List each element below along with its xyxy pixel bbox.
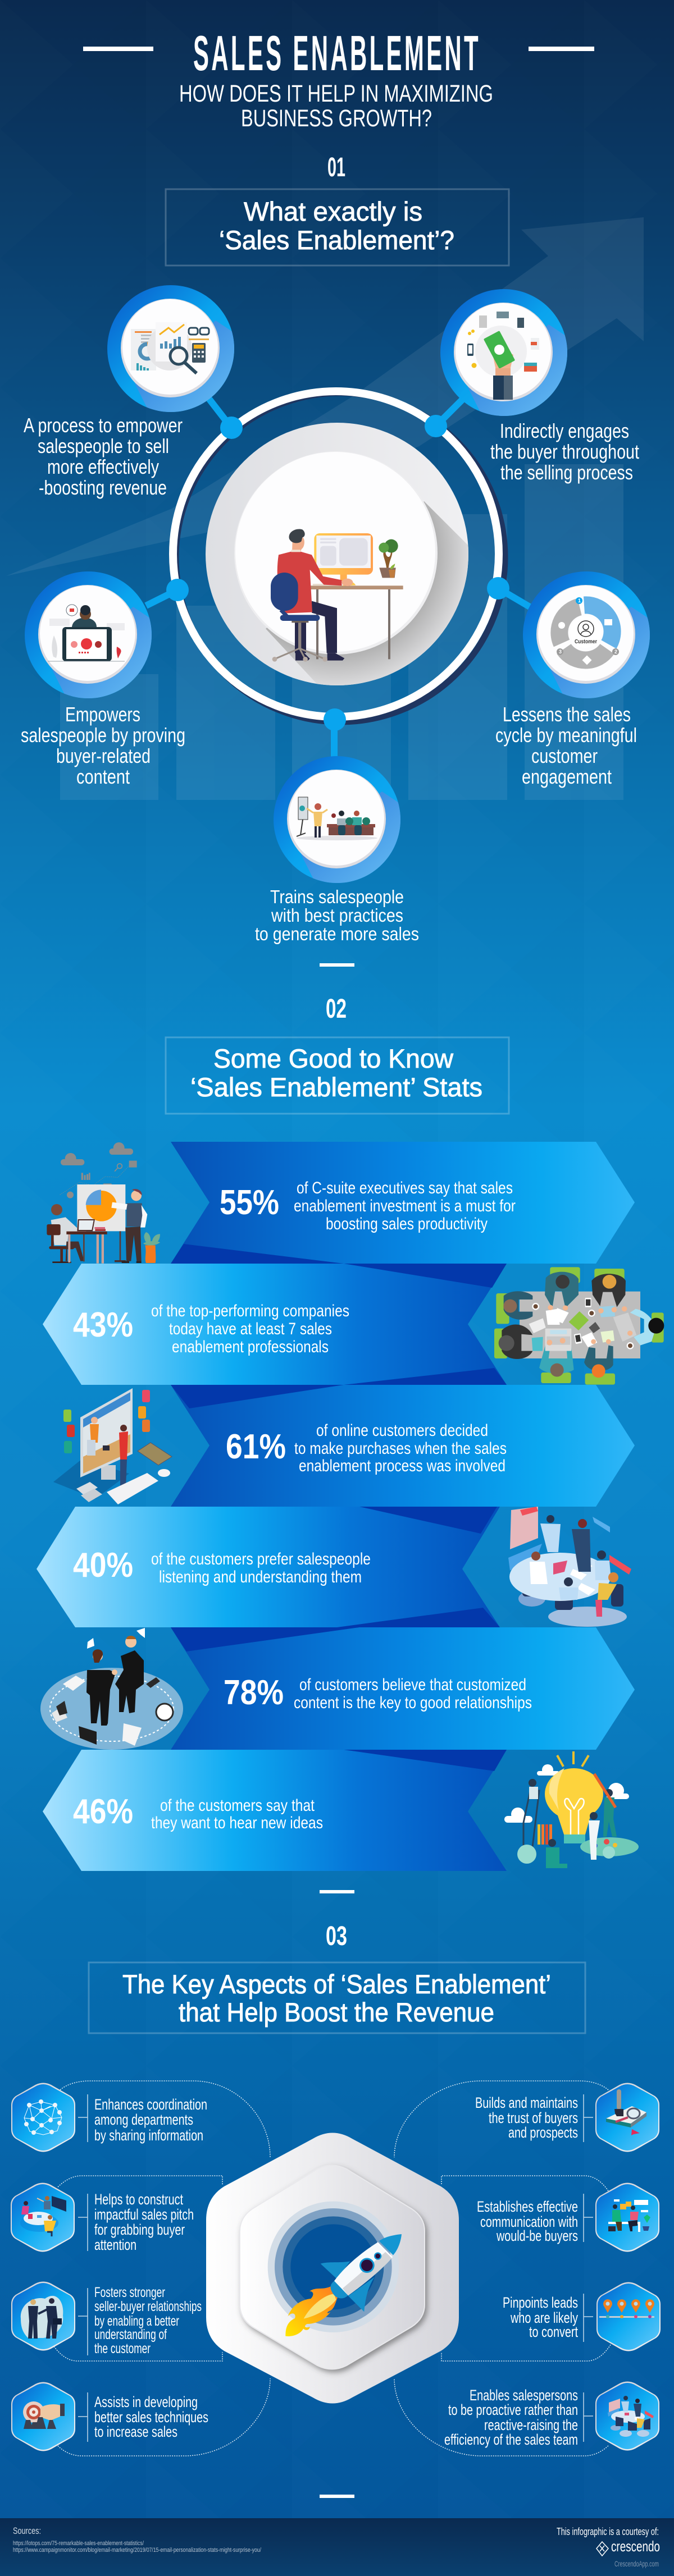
aspect 3 right xyxy=(503,2282,661,2351)
subtitle: BUSINESS GROWTH? xyxy=(241,105,432,132)
text: Enables salespersons xyxy=(470,2387,578,2404)
text: indirectly engages: the selling process xyxy=(500,461,633,484)
text: indirectly engages: the buyer throughout xyxy=(490,440,639,463)
stat 1 xyxy=(47,1142,635,1264)
text: indirectly engages: Indirectly engages xyxy=(500,419,629,442)
text: empowers xyxy=(21,703,185,788)
leader line xyxy=(78,2094,88,2142)
leader line xyxy=(78,2288,88,2355)
courtesy and logo xyxy=(557,2526,660,2568)
logo mark xyxy=(596,2542,608,2556)
text xyxy=(503,2294,578,2340)
hexagon icon: handshake xyxy=(11,2281,75,2351)
hexagon icon: sales pitch xyxy=(11,2182,75,2252)
background chart: bars and rising arrow xyxy=(6,217,644,800)
text: Pinpoints leads xyxy=(503,2294,578,2311)
leader line xyxy=(584,2094,593,2142)
illustration: top view table xyxy=(494,1267,664,1385)
stat text: enablement investment is a must for xyxy=(294,1197,516,1215)
text: lessens: engagement xyxy=(522,765,612,788)
text: indirectly engages xyxy=(490,419,639,484)
value 55%: 55% xyxy=(220,1183,279,1222)
illustration: person at desk xyxy=(271,529,403,662)
stat text: enablement process was involved xyxy=(299,1457,506,1475)
text: process: A process to empower xyxy=(24,414,183,437)
text xyxy=(477,2198,578,2244)
item: indirectly engages icon xyxy=(440,289,582,425)
text: Builds and maintains xyxy=(475,2094,578,2111)
illustration: light bulb xyxy=(504,1751,639,1868)
value 46%: 46% xyxy=(73,1792,133,1831)
arrow band 4 xyxy=(37,1507,500,1627)
text: process: -boosting revenue xyxy=(39,476,167,499)
aspect 4 left xyxy=(11,2382,208,2451)
sources xyxy=(13,2525,262,2554)
text: trains: to generate more sales xyxy=(255,923,419,944)
section number 02: 02 xyxy=(326,994,347,1024)
text: Fosters stronger xyxy=(94,2285,165,2300)
text xyxy=(94,2285,202,2357)
hexagon icon: conversation xyxy=(595,2182,659,2252)
text: efficiency of the sales team xyxy=(444,2431,578,2448)
item: lessens icon: 3 xyxy=(559,649,562,655)
stat text xyxy=(151,1550,371,1586)
text: lessens: Lessens the sales xyxy=(503,703,631,726)
stat text: listening and understanding them xyxy=(159,1568,362,1586)
aspect 1 left xyxy=(11,2083,207,2152)
aspect 1 right xyxy=(475,2083,659,2152)
heading box 02: ‘Sales Enablement’ Stats xyxy=(190,1072,482,1102)
stat 5 xyxy=(40,1627,635,1750)
footer xyxy=(0,2518,674,2576)
stat text: today have at least 7 sales xyxy=(169,1320,332,1338)
item: trains icon xyxy=(274,756,416,893)
illustration: meeting xyxy=(508,1507,631,1627)
text: the customer xyxy=(94,2341,151,2357)
stat text: they want to hear new ideas xyxy=(151,1814,323,1832)
value 78%: 78% xyxy=(224,1673,284,1712)
aspect 2 left xyxy=(11,2182,194,2253)
stat text: enablement professionals xyxy=(172,1338,329,1356)
title block xyxy=(83,25,594,132)
stat text xyxy=(151,1796,323,1832)
heading box 02: Some Good to Know xyxy=(213,1044,454,1073)
sources: https://lotops.com/75-remarkable-sales-enablement-statistics/ xyxy=(13,2540,144,2547)
aspect 2 right xyxy=(477,2182,659,2252)
text: better sales techniques xyxy=(94,2409,208,2426)
leader line xyxy=(584,2392,593,2442)
text xyxy=(94,2394,208,2440)
text xyxy=(94,2096,207,2144)
stat text: of C-suite executives say that sales xyxy=(297,1179,513,1197)
connector nodes xyxy=(166,415,509,731)
stat 3 xyxy=(53,1385,635,1507)
text: communication with xyxy=(480,2213,578,2230)
stat text xyxy=(294,1179,516,1233)
stat text xyxy=(151,1302,349,1356)
text: lessens: cycle by meaningful xyxy=(495,724,637,747)
item: lessens icon xyxy=(523,571,665,708)
text: reactive-raising the xyxy=(484,2417,578,2433)
illustration: presentation xyxy=(47,1142,160,1264)
text: process: salespeople to sell xyxy=(38,434,169,457)
text: Helps to construct xyxy=(94,2191,183,2208)
heading box 01: ‘Sales Enablement’? xyxy=(219,225,454,255)
stat text xyxy=(294,1421,507,1475)
aspect 4 right xyxy=(444,2381,659,2451)
arrow band 3 xyxy=(171,1385,635,1507)
subtitle: HOW DOES IT HELP IN MAXIMIZING xyxy=(179,80,493,107)
text: the trust of buyers xyxy=(489,2110,578,2126)
arrow band 6 xyxy=(43,1750,507,1871)
text: by sharing information xyxy=(94,2127,203,2144)
text: attention xyxy=(94,2236,136,2253)
arrow band 1 xyxy=(171,1142,635,1264)
item: lessens icon: 2 xyxy=(614,649,617,655)
item: lessens icon: Customer xyxy=(575,639,597,645)
text: empowers: salespeople by proving xyxy=(21,724,185,747)
hexagon icon: target and chess xyxy=(11,2382,75,2451)
heading box 03 xyxy=(89,1962,585,2033)
text: trains xyxy=(255,886,419,944)
stat 6 xyxy=(43,1750,639,1871)
stat text: of the top-performing companies xyxy=(151,1302,349,1320)
arrow band 2 xyxy=(43,1264,507,1385)
text: process: more effectively xyxy=(47,455,159,478)
stat text: boosting sales productivity xyxy=(326,1215,488,1233)
text: to convert xyxy=(529,2323,578,2340)
stat text: of the customers say that xyxy=(160,1796,315,1815)
central disk with illustration xyxy=(206,423,468,685)
text: understanding of xyxy=(94,2327,167,2342)
leader line xyxy=(78,2392,88,2442)
text: to increase sales xyxy=(94,2423,177,2440)
hexagon icon: book and magnifier xyxy=(595,2083,659,2152)
text: for grabbing buyer xyxy=(94,2221,185,2238)
illustration: handshake xyxy=(40,1628,183,1750)
text: and prospects xyxy=(508,2124,578,2141)
arrow band 5 xyxy=(171,1627,635,1750)
text: seller-buyer relationships xyxy=(94,2299,202,2314)
hexagon icon: network xyxy=(11,2083,75,2152)
text: trains: with best practices xyxy=(271,905,403,926)
sources: Sources: xyxy=(13,2525,41,2536)
text: empowers: Empowers xyxy=(65,703,140,726)
text: empowers: content xyxy=(76,765,130,788)
value 61%: 61% xyxy=(226,1427,286,1466)
text: would-be buyers xyxy=(496,2227,578,2244)
heading box 01 xyxy=(166,189,509,266)
dotted outlines xyxy=(54,2081,611,2456)
heading box 01: What exactly is xyxy=(244,196,422,226)
leader line xyxy=(78,2194,88,2251)
text: empowers: buyer-related xyxy=(56,744,151,767)
stat text: of online customers decided xyxy=(316,1421,488,1440)
central hexagon with rocket xyxy=(206,2133,459,2404)
text xyxy=(94,2191,194,2253)
heading box 03: The Key Aspects of ‘Sales Enablement’ xyxy=(122,1969,551,1999)
section number 01: 01 xyxy=(327,153,345,182)
text: process xyxy=(24,414,183,499)
leader line xyxy=(584,2294,593,2342)
text: who are likely xyxy=(510,2309,578,2326)
text: lessens: customer xyxy=(531,744,598,767)
stat text: content is the key to good relationships xyxy=(294,1694,532,1712)
text: by enabling a better xyxy=(94,2313,179,2329)
illustration: online store xyxy=(53,1388,172,1504)
connectors xyxy=(146,398,530,758)
text: Establishes effective xyxy=(477,2198,578,2215)
hexagon icon: team meeting xyxy=(595,2381,659,2451)
stat text: to make purchases when the sales xyxy=(294,1439,507,1458)
value 40%: 40% xyxy=(73,1546,133,1585)
stat text xyxy=(294,1676,532,1712)
central ring xyxy=(173,391,505,722)
stat text: of customers believe that customized xyxy=(299,1676,526,1694)
text: impactful sales pitch xyxy=(94,2206,194,2223)
text xyxy=(475,2094,578,2141)
text xyxy=(444,2387,578,2448)
heading box 03: that Help Boost the Revenue xyxy=(179,1997,494,2027)
stat 4 xyxy=(37,1507,631,1627)
item: process icon xyxy=(107,285,249,422)
text: Enhances coordination xyxy=(94,2096,207,2113)
rocket emblem xyxy=(268,2202,402,2336)
leader line xyxy=(584,2194,593,2242)
text: lessens xyxy=(495,703,637,788)
sources: https://www.campaignmonitor.com/blog/email-marketing/2019/07/15-email-personalization-stats-might-surprise-you/ xyxy=(13,2547,262,2554)
text: to be proactive rather than xyxy=(448,2401,578,2418)
stat 2 xyxy=(43,1264,664,1385)
hexagon icon: pins on a line xyxy=(596,2282,661,2351)
text: among departments xyxy=(94,2111,193,2128)
item: empowers icon xyxy=(25,571,167,708)
text: trains: Trains salespeople xyxy=(270,886,404,907)
subtitle xyxy=(179,80,493,132)
section number 03: 03 xyxy=(326,1921,347,1951)
value 43%: 43% xyxy=(73,1306,133,1344)
aspect 3 left xyxy=(11,2281,202,2357)
stat text: of the customers prefer salespeople xyxy=(151,1550,371,1568)
text: Assists in developing xyxy=(94,2394,198,2410)
item: lessens icon: 1 xyxy=(578,598,581,603)
heading box 02 xyxy=(166,1037,509,1114)
